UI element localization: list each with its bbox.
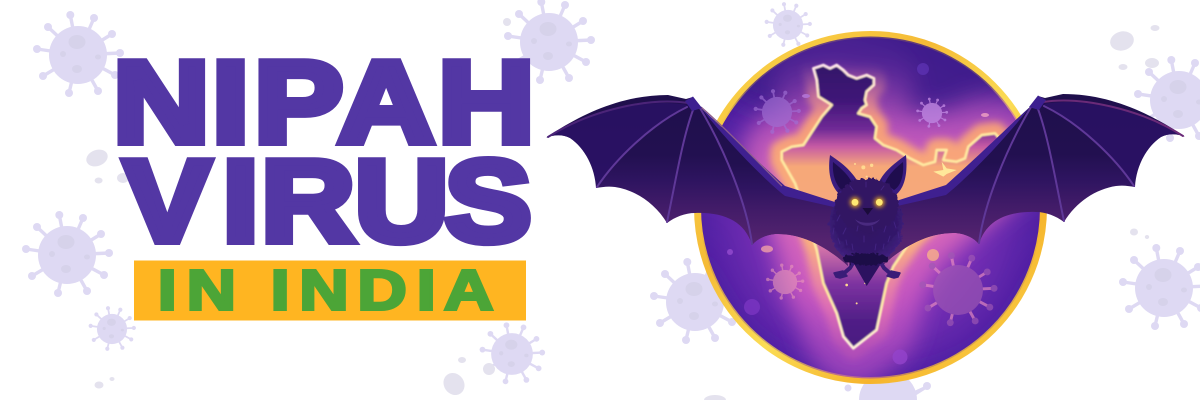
disc virus: upper right xyxy=(916,98,948,128)
disc virus: lower left xyxy=(766,264,804,300)
map inner glow orange xyxy=(782,65,1013,348)
map fill and bright coastline xyxy=(782,65,1013,348)
banner text: IN INDIA xyxy=(158,259,493,322)
banner: IN INDIA xyxy=(134,259,526,322)
banner background xyxy=(134,260,526,320)
sparkle specks xyxy=(845,163,874,304)
eyes xyxy=(850,197,884,207)
right ear inner xyxy=(885,162,903,190)
background virus: below banner xyxy=(480,322,545,384)
disc bokeh spots xyxy=(727,63,989,364)
legs and feet xyxy=(834,258,900,278)
outer wing panel xyxy=(548,103,688,187)
map outer glow magenta xyxy=(782,65,1013,348)
background virus: right lower xyxy=(1119,244,1200,330)
bat xyxy=(546,94,1185,286)
finger bones xyxy=(548,102,752,244)
background virus: small left xyxy=(89,306,136,351)
eye glow xyxy=(850,197,884,207)
background virus: left xyxy=(22,211,113,297)
disc virus: upper left xyxy=(754,89,801,134)
title line: NIPAH: NIPAH xyxy=(113,38,534,167)
nose xyxy=(862,208,873,215)
background virus: behind medallion bottom xyxy=(844,371,931,400)
disc virus: large lower right xyxy=(919,252,998,326)
inner membrane xyxy=(701,108,848,266)
background virus: right upper xyxy=(1134,56,1200,142)
belly shadow xyxy=(844,253,888,265)
left ear inner xyxy=(833,162,852,191)
right finger bones xyxy=(979,101,1183,243)
torso xyxy=(829,185,903,265)
fur strokes xyxy=(833,182,899,250)
right thumb joint xyxy=(1029,96,1046,110)
right eye xyxy=(876,199,883,206)
island xyxy=(933,162,957,177)
tail xyxy=(853,262,882,286)
background virus: top left xyxy=(33,11,124,97)
left eye xyxy=(852,199,858,206)
ring xyxy=(698,34,1044,380)
background virus: small top xyxy=(765,2,812,47)
furry body xyxy=(829,178,903,265)
mouth xyxy=(855,219,880,226)
map of India xyxy=(782,65,1013,348)
right wing membrane xyxy=(883,94,1185,265)
right outer panel xyxy=(1043,102,1183,186)
title: NIPAH VIRUS xyxy=(113,38,534,266)
left ear xyxy=(829,155,858,197)
top shade xyxy=(726,36,1012,124)
background virus: top centre xyxy=(504,0,595,84)
right ear xyxy=(879,155,906,196)
head xyxy=(835,178,899,232)
right wing xyxy=(883,94,1185,265)
lower edge shade xyxy=(703,240,1037,378)
medallion: India map in gold ring xyxy=(698,0,1044,400)
left wing membrane xyxy=(546,95,848,266)
right ear outer xyxy=(879,155,906,196)
right arm xyxy=(893,107,1030,207)
right inner membrane xyxy=(883,107,1030,265)
leading edge highlight xyxy=(701,107,782,186)
disc artwork xyxy=(703,36,1037,378)
arm xyxy=(701,108,838,208)
title line: VIRUS: VIRUS xyxy=(124,137,532,266)
background virus: behind medallion left xyxy=(650,258,741,344)
left ear outer xyxy=(829,155,858,197)
left wing xyxy=(546,95,848,266)
thumb joint xyxy=(685,96,702,111)
